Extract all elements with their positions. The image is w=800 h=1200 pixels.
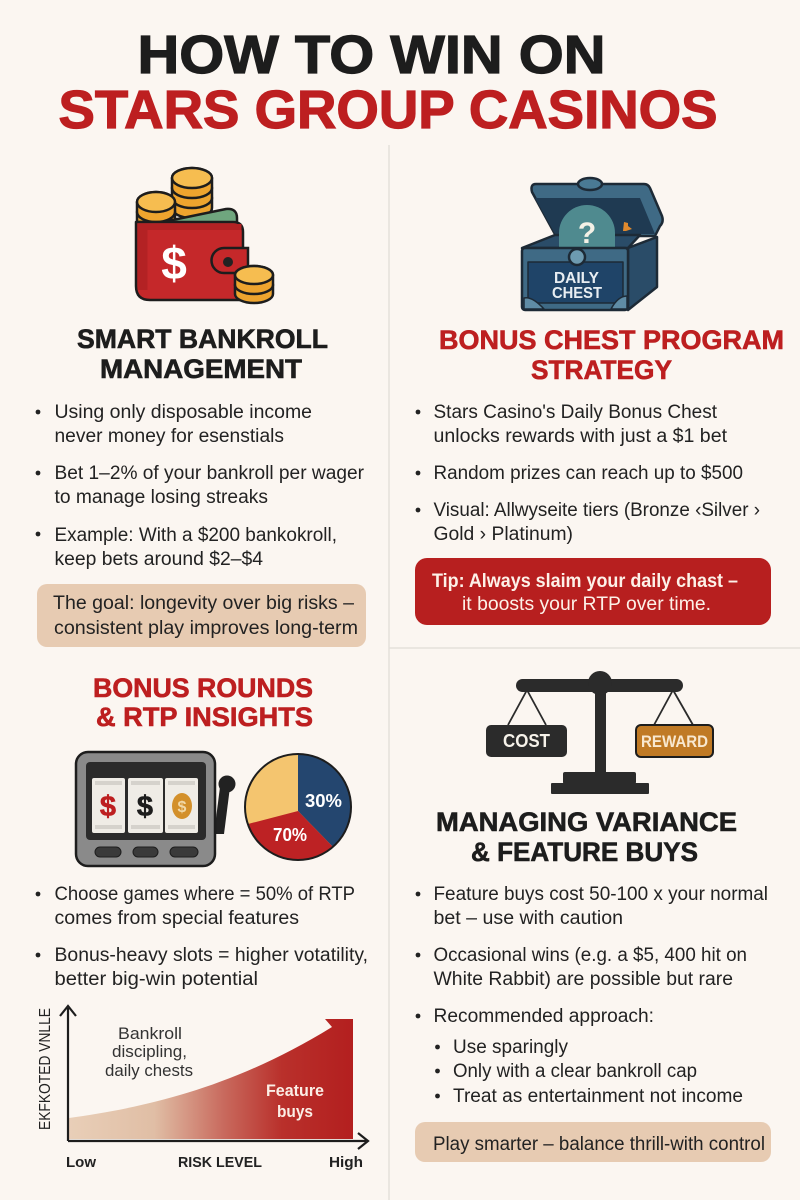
callout: the goal: The goal: longevity over big risks – <box>53 593 354 614</box>
icon: wallet with coins <box>136 168 273 303</box>
callout: tip <box>415 558 771 625</box>
curve label: feature buys: Feature <box>266 1081 324 1100</box>
bullet list: feature buy guidance: Treat as entertainment not income <box>453 1086 743 1107</box>
chart area <box>69 1019 353 1139</box>
heading: bonus chest program strategy: BONUS CHEST PROGRAM <box>439 325 784 355</box>
icon: slot machine: $ <box>137 791 153 823</box>
icon: wallet with coins: $ <box>161 237 187 289</box>
bullet list: feature buy guidance: bet – use with caution <box>434 908 623 929</box>
callout: tip: Tip: Always slaim your daily chast – <box>432 571 738 592</box>
panel: bonus chest program strategy <box>415 178 784 625</box>
axes <box>60 1006 368 1149</box>
curve label: bankroll discipline: discipling, <box>112 1042 187 1061</box>
curve label: bankroll discipline: daily chests <box>105 1061 193 1080</box>
title <box>58 25 718 140</box>
heading: bonus rounds and rtp insights <box>93 673 313 732</box>
panel: bonus rounds and rtp insights <box>36 673 368 1171</box>
bullet list: feature buy guidance: Feature buys cost 50-100 x your normal <box>434 884 768 905</box>
heading: managing variance and feature buys: & FEATURE BUYS <box>471 837 698 867</box>
icon: daily chest: DAILY <box>554 270 599 287</box>
callout: tip: it boosts your RTP over time. <box>462 594 711 615</box>
callout: play smarter <box>415 1122 771 1162</box>
x axis labels: Low <box>66 1155 97 1171</box>
heading: bonus rounds and rtp insights: BONUS ROUNDS <box>93 673 313 703</box>
bullet list: feature buy guidance: Only with a clear bankroll cap <box>453 1061 697 1082</box>
title: HOW TO WIN ON <box>138 25 606 85</box>
bullet list: feature buy guidance: Recommended approach: <box>434 1006 654 1027</box>
bullet list: feature buy guidance: Occasional wins (e.g. a $5, 400 hit on <box>434 945 747 966</box>
callout: the goal: consistent play improves long-term <box>54 618 358 639</box>
icon: daily chest <box>522 178 663 310</box>
bullet list: chest details: Stars Casino's Daily Bonus Chest <box>434 402 718 423</box>
chart: risk versus expected value <box>37 1006 368 1171</box>
heading: smart bankroll management: SMART BANKROLL <box>77 324 328 354</box>
bullet list: feature buy guidance <box>416 884 768 1107</box>
chart: rtp pie <box>245 754 351 860</box>
chart: rtp pie: 70% <box>273 825 307 845</box>
bullet list: feature buy guidance: White Rabbit) are possible but rare <box>434 969 733 990</box>
x axis labels: RISK LEVEL <box>178 1155 262 1171</box>
chart: rtp pie: 30% <box>305 791 342 811</box>
callout: the goal <box>37 584 366 647</box>
heading: bonus chest program strategy: STRATEGY <box>531 355 672 385</box>
bullet list: rtp tips: Bonus-heavy slots = higher votatility, <box>54 945 368 966</box>
heading: managing variance and feature buys <box>436 807 737 867</box>
icon: cost and reward scale: COST <box>503 731 550 751</box>
bullet list: bankroll tips: never money for esenstials <box>54 426 284 447</box>
bullet list: rtp tips <box>36 884 368 990</box>
bullet list: rtp tips: Choose games where = 50% of RTP <box>54 884 355 905</box>
bullet list: bankroll tips: keep bets around $2–$4 <box>54 549 263 570</box>
bullet list: bankroll tips: Bet 1–2% of your bankroll per wager <box>54 463 365 484</box>
bullet list: bankroll tips <box>36 402 365 570</box>
heading: managing variance and feature buys: MANAGING VARIANCE <box>436 807 737 837</box>
bullet list: chest details: Gold › Platinum) <box>434 524 573 545</box>
bullet list: chest details: unlocks rewards with just a $1 bet <box>434 426 728 447</box>
heading: bonus chest program strategy <box>439 325 784 385</box>
bullet list: chest details: Visual: Allwyseite tiers (Bronze ‹Silver › <box>434 500 760 521</box>
bullet list: chest details <box>416 402 760 545</box>
icon: daily chest: ? <box>578 217 596 250</box>
curve label: bankroll discipline: Bankroll <box>118 1024 182 1043</box>
icon: slot machine <box>76 752 236 866</box>
title: STARS GROUP CASINOS <box>58 80 718 140</box>
curve label: bankroll discipline <box>105 1024 193 1080</box>
curve label: feature buys <box>266 1081 324 1121</box>
bullet list: feature buy guidance: Use sparingly <box>453 1037 568 1058</box>
heading: smart bankroll management: MANAGEMENT <box>100 354 302 384</box>
heading: bonus rounds and rtp insights: & RTP INSIGHTS <box>96 702 313 732</box>
bullet list: bankroll tips: to manage losing streaks <box>54 487 268 508</box>
bullet list: rtp tips: comes from special features <box>54 908 299 929</box>
icon: slot machine: $ <box>178 799 187 816</box>
bullet list: bankroll tips: Example: With a $200 bankokroll, <box>54 525 337 546</box>
icon: slot machine: $ <box>100 791 116 823</box>
y axis label: EKFKOTED VNLLE <box>37 1008 54 1130</box>
x axis labels <box>66 1155 363 1171</box>
heading: smart bankroll management <box>77 324 328 384</box>
icon: cost and reward scale: REWARD <box>641 732 708 751</box>
bullet list: chest details: Random prizes can reach up to $500 <box>434 463 743 484</box>
bullet list: bankroll tips: Using only disposable income <box>54 402 312 423</box>
icon: daily chest: CHEST <box>552 285 602 302</box>
bullet list: rtp tips: better big-win potential <box>54 969 258 990</box>
curve label: feature buys: buys <box>277 1102 313 1121</box>
icon: cost and reward scale <box>486 671 713 794</box>
x axis labels: High <box>329 1155 363 1171</box>
panel: smart bankroll management <box>36 168 366 647</box>
panel: managing variance and feature buys <box>415 671 771 1162</box>
callout: play smarter: Play smarter – balance thrill-with control <box>433 1134 765 1155</box>
